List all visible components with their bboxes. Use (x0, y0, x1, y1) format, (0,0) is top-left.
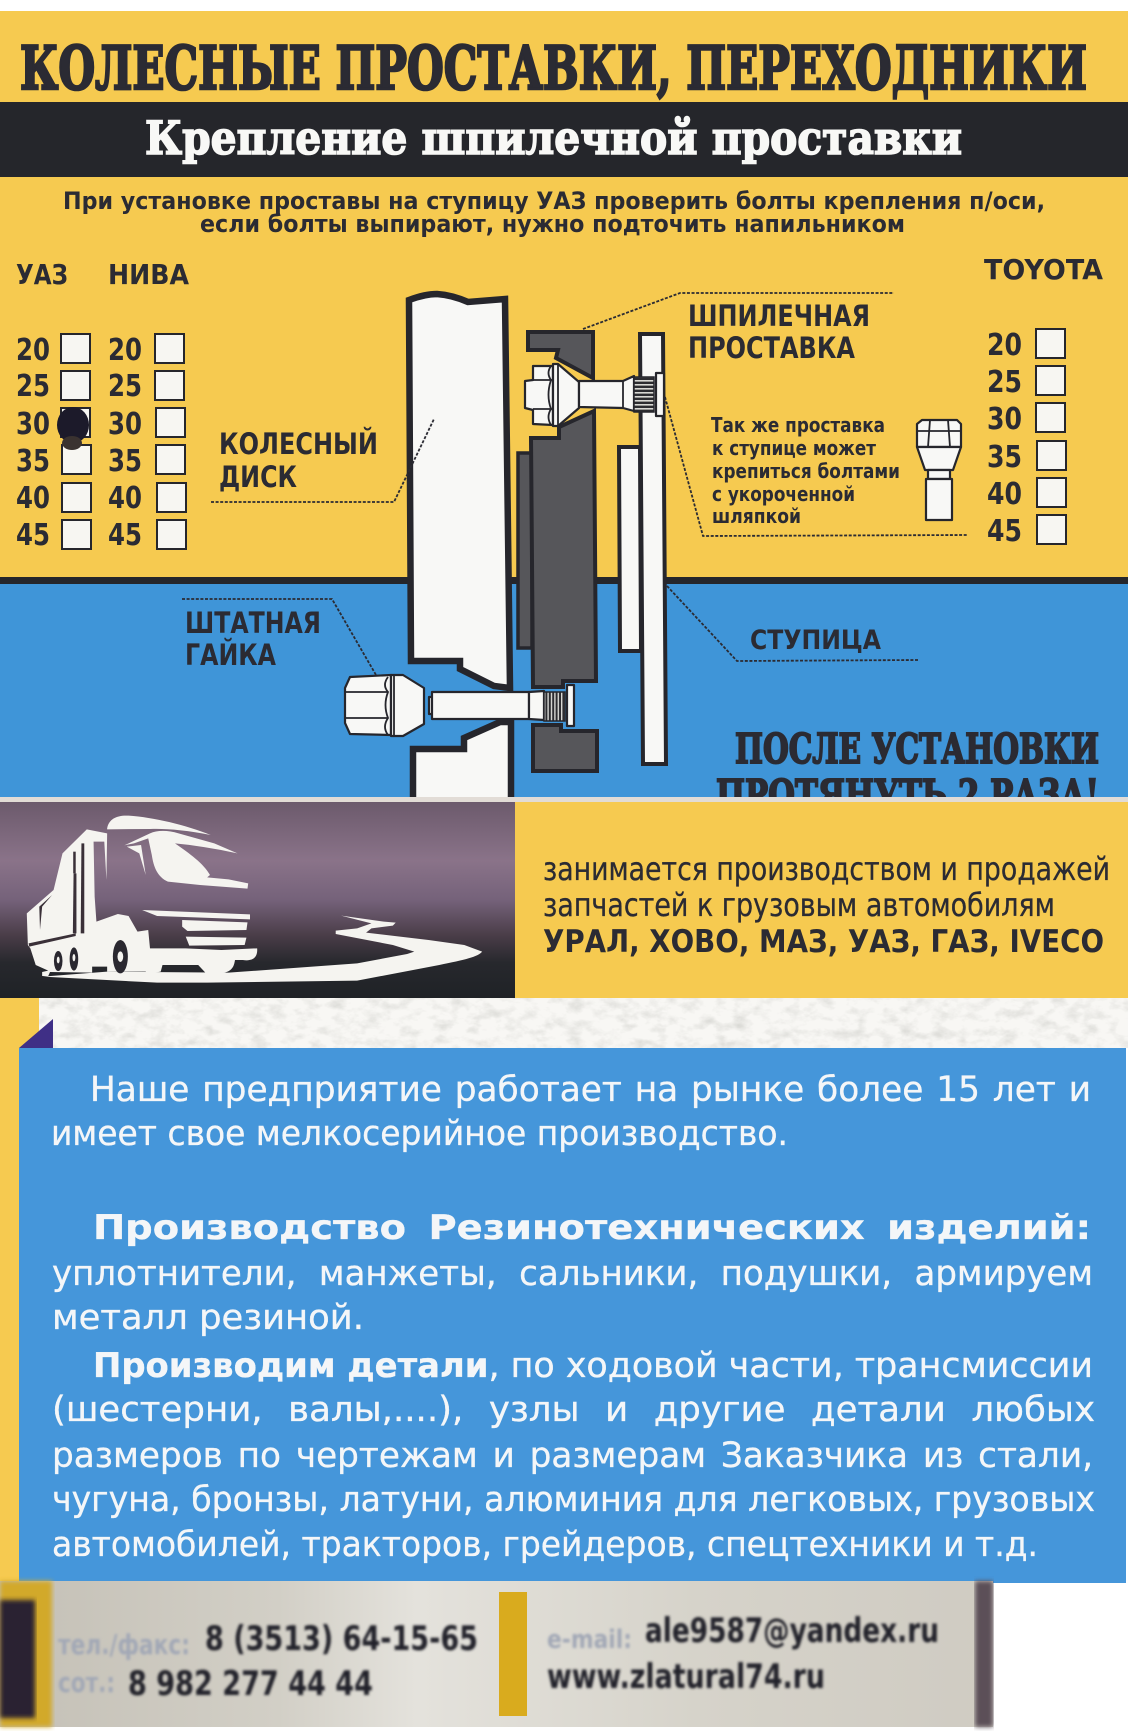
size table: TOYOTA: 25 (987, 365, 1022, 400)
label: hub: СТУПИЦА (750, 625, 881, 656)
size table: NIVA (108, 258, 189, 553)
spacer thin plate (518, 453, 532, 648)
panel: contact card (0, 1581, 993, 1727)
contact: phones: 8 982 277 44 44 (128, 1664, 373, 1704)
ink mark on size 30 (57, 407, 89, 450)
paragraph: rubber products: металл резиной. (52, 1298, 364, 1338)
size table: NIVA: 45 (108, 518, 142, 553)
size table: UAZ: 45 (16, 518, 50, 553)
instruction text: если болты выпирают, нужно подточить напильником (200, 210, 905, 238)
size table: UAZ: 40 (16, 481, 50, 516)
icon: truck and road (27, 816, 482, 983)
size table: NIVA: НИВА (108, 258, 189, 291)
wheel disc lower part (413, 722, 511, 800)
paragraph: parts manufacturing: (шестерни, валы,....), узлы и другие детали любых (52, 1390, 1095, 1430)
size table: UAZ: 20 (16, 333, 50, 368)
contact: phones: сот.: (58, 1666, 115, 1699)
corner fold triangle (19, 1019, 53, 1048)
label: stud spacer (583, 293, 894, 365)
subtitle: Крепление шпилечной проставки (145, 111, 962, 165)
size table: UAZ: 25 (16, 369, 50, 404)
paragraph: parts manufacturing (52, 1346, 1095, 1565)
size table: UAZ: 35 (16, 444, 50, 479)
panel: blue diagram section (0, 577, 1128, 797)
size table: UAZ: 30 (16, 407, 50, 442)
label: stud spacer: ПРОСТАВКА (688, 331, 855, 365)
paragraph: experience: Наше предприятие работает на рынке более 15 лет и (90, 1070, 1091, 1110)
textured white strip (0, 998, 1128, 1581)
label: wheel disc (211, 419, 434, 502)
contact: email and website (547, 1611, 939, 1697)
size table: UAZ (16, 258, 91, 553)
size table: TOYOTA: TOYOTA (984, 253, 1103, 286)
size table: NIVA: 35 (108, 444, 142, 479)
note: short-head bolts: с укороченной (712, 482, 855, 506)
label: stud spacer: ШПИЛЕЧНАЯ (688, 299, 870, 333)
warning text (716, 732, 1098, 797)
instruction text (63, 187, 1045, 238)
paragraph: rubber products (52, 1208, 1093, 1338)
size table: NIVA: 30 (108, 407, 142, 442)
diagram: wheel spacer assembly (345, 294, 666, 800)
paragraph: parts manufacturing: автомобилей, тракторов, грейдеров, спецтехники и т.д. (52, 1525, 1038, 1565)
paragraph: parts manufacturing: чугуна, бронзы, латуни, алюминия для легковых, грузовых (52, 1480, 1095, 1520)
size table: TOYOTA (984, 253, 1103, 549)
label: standard nut (182, 599, 376, 675)
divider strip (0, 797, 1128, 802)
paragraph: experience (51, 1070, 1091, 1154)
size table: NIVA: 40 (108, 481, 142, 516)
icon: short-head bolt (917, 420, 961, 520)
spacer main body (531, 411, 596, 687)
spacer lower part (533, 725, 597, 771)
size table: TOYOTA: 20 (987, 328, 1022, 363)
paragraph: parts manufacturing: Производим детали, по ходовой части, трансмиссии (93, 1346, 1093, 1386)
size table: TOYOTA: 35 (987, 440, 1022, 475)
label: hub (667, 586, 918, 661)
paragraph: experience: имеет свое мелкосерийное производство. (51, 1114, 788, 1154)
paragraph: rubber products: Производство Резинотехнических изделий: (93, 1208, 1091, 1248)
size table: TOYOTA: 40 (987, 477, 1022, 512)
hub outer plate (640, 334, 666, 764)
paragraph: parts manufacturing: размеров по чертежам и размерам Заказчика из стали, (52, 1436, 1093, 1476)
contact: phones (58, 1619, 478, 1704)
hub inner plate (619, 447, 641, 651)
size table: TOYOTA: 45 (987, 514, 1022, 549)
spacer upper part (528, 332, 593, 378)
panel: company tagline (515, 802, 1128, 998)
size table: NIVA: 25 (108, 369, 142, 404)
contact: phones: тел./факс: (58, 1628, 190, 1661)
size table: NIVA: 20 (108, 333, 142, 368)
size table: UAZ: УАЗ (16, 258, 68, 291)
instruction text: При установке проставы на ступицу УАЗ проверить болты крепления п/оси, (63, 187, 1045, 215)
note: short-head bolts: шляпкой (712, 504, 801, 528)
paragraph: rubber products: уплотнители, манжеты, сальники, подушки, армируем (52, 1254, 1093, 1294)
note: short-head bolts: Так же проставка (711, 413, 885, 437)
panel: truck logo (0, 802, 515, 998)
contact: email and website: ale9587@yandex.ru (645, 1611, 939, 1651)
tagline text (543, 850, 1110, 960)
wheel disc upper part (409, 294, 510, 688)
wheel stud with standard nut (345, 675, 574, 736)
note: short-head bolts (665, 397, 968, 536)
label: wheel disc: ДИСК (219, 460, 297, 494)
panel: company description (19, 1048, 1126, 1583)
contact: email and website: e-mail: (547, 1625, 632, 1655)
contact: email and website: www.zlatural74.ru (547, 1657, 825, 1697)
label: wheel disc: КОЛЕСНЫЙ (219, 427, 378, 461)
note: short-head bolts: к ступице может (712, 436, 876, 460)
contact: phones: 8 (3513) 64-15-65 (205, 1619, 478, 1659)
heading band (0, 102, 1128, 177)
size table: TOYOTA: 30 (987, 402, 1022, 437)
label: standard nut: ГАЙКА (185, 638, 276, 672)
label: standard nut: ШТАТНАЯ (185, 606, 321, 640)
panel: yellow top section (0, 11, 1128, 579)
note: short-head bolts: крепиться болтами (712, 459, 900, 483)
spacer stud bolt (525, 364, 664, 426)
